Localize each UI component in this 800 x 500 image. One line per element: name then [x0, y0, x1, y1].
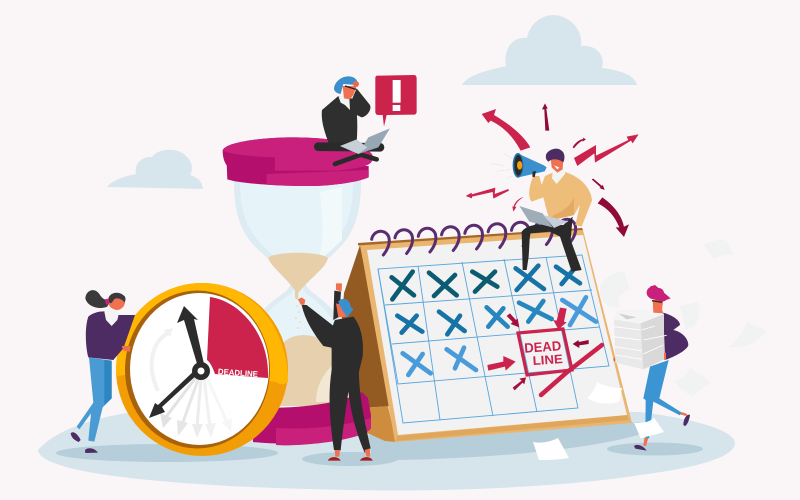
- ponytail: [85, 290, 110, 308]
- character: man reaching up: [298, 283, 373, 461]
- trousers: [77, 357, 112, 442]
- collar: [338, 96, 350, 110]
- white paper on ground: [533, 438, 569, 460]
- clock rim: [125, 290, 270, 448]
- trousers: [643, 360, 682, 438]
- character: woman pushing clock: [71, 290, 135, 453]
- legs: [318, 134, 380, 160]
- hourglass: [223, 137, 373, 406]
- ghost hands: [166, 376, 228, 427]
- red arrows: [466, 103, 639, 237]
- face: [551, 158, 563, 173]
- sweater body: [322, 96, 357, 147]
- collar: [552, 169, 565, 184]
- head: [336, 303, 350, 317]
- bottom sand: [262, 335, 364, 406]
- glasses: [652, 301, 662, 302]
- sand highlight: [316, 356, 358, 402]
- head: [108, 293, 125, 310]
- hour hand: [149, 369, 199, 418]
- calendar frame: [360, 230, 632, 442]
- calendar grid: [378, 255, 609, 423]
- paper stack: [614, 308, 667, 369]
- calendar rings: [372, 219, 576, 255]
- sound lines: [491, 153, 512, 179]
- white paper on calendar: [587, 382, 622, 403]
- deadline sector: [207, 297, 268, 378]
- hourglass base: [253, 392, 371, 444]
- shoes: [683, 415, 690, 426]
- face: [653, 300, 663, 313]
- sweater: [86, 311, 135, 360]
- upper cap: [223, 137, 373, 171]
- hand on head: [353, 81, 359, 87]
- clock: [116, 283, 288, 456]
- hourglass inner glass: [240, 182, 353, 405]
- calendar bottom shade: [396, 415, 629, 441]
- falling sand: [295, 282, 299, 300]
- hourglass highlight: [317, 187, 342, 262]
- deadline stamp: LINE: [532, 352, 563, 368]
- laptop: [519, 206, 568, 228]
- deadline stamp: DEAD: [524, 338, 562, 356]
- legs: [522, 217, 582, 272]
- calendar stand light: [364, 406, 396, 442]
- hair: [334, 76, 357, 94]
- hourglass glass: [234, 180, 361, 405]
- sweater: [529, 172, 592, 227]
- clock face: [130, 293, 269, 445]
- calendar: [340, 219, 632, 442]
- calendar stand dark: [340, 245, 392, 408]
- hand: [659, 353, 666, 360]
- hair: [546, 149, 564, 162]
- shoes: [328, 457, 341, 461]
- hair: [338, 299, 353, 317]
- flying paper at leg: [634, 418, 664, 438]
- cloud: top right: [462, 15, 637, 85]
- top sand: [268, 253, 328, 292]
- hourglass caps: [223, 137, 373, 186]
- deadline strike: [541, 345, 602, 395]
- deadline label: DEADLINE: [218, 367, 259, 379]
- hand: [122, 346, 131, 352]
- clock hub: [192, 362, 210, 380]
- clock gold case: [116, 283, 288, 456]
- torso: [331, 317, 363, 374]
- neck and face: [343, 86, 357, 99]
- character: man with megaphone: [466, 103, 639, 272]
- ground shadows: [56, 422, 703, 466]
- calendar red arrows: [487, 308, 589, 390]
- clock case upper highlight: [116, 283, 288, 384]
- hands: [298, 297, 305, 305]
- deadline stamp: [518, 329, 572, 375]
- speech bubble with exclamation: [375, 75, 417, 127]
- ground: [38, 411, 735, 490]
- arm shade: [550, 197, 574, 221]
- background floating papers: [600, 240, 766, 397]
- sweater: [663, 313, 688, 360]
- lower cap: [227, 164, 369, 186]
- character: man sitting on hourglass: [318, 75, 417, 164]
- laptop: [340, 128, 390, 154]
- calendar top bar: [358, 228, 583, 246]
- calendar paper: [367, 235, 627, 435]
- glasses: [345, 86, 356, 89]
- collar: [104, 307, 119, 326]
- minute hand: [177, 306, 204, 367]
- shoes: [71, 432, 81, 442]
- hair: [647, 285, 671, 302]
- raised arm right: [333, 291, 341, 320]
- raised arm: [352, 88, 370, 117]
- megaphone: [513, 153, 547, 178]
- raised arm left: [302, 305, 337, 348]
- cloud: left: [107, 150, 203, 189]
- rotation arrow faint: [152, 333, 168, 391]
- calendar X marks: [392, 265, 596, 375]
- legs: [330, 368, 371, 453]
- character: man carrying papers: [613, 285, 690, 451]
- hourglass base lower band: [276, 418, 371, 445]
